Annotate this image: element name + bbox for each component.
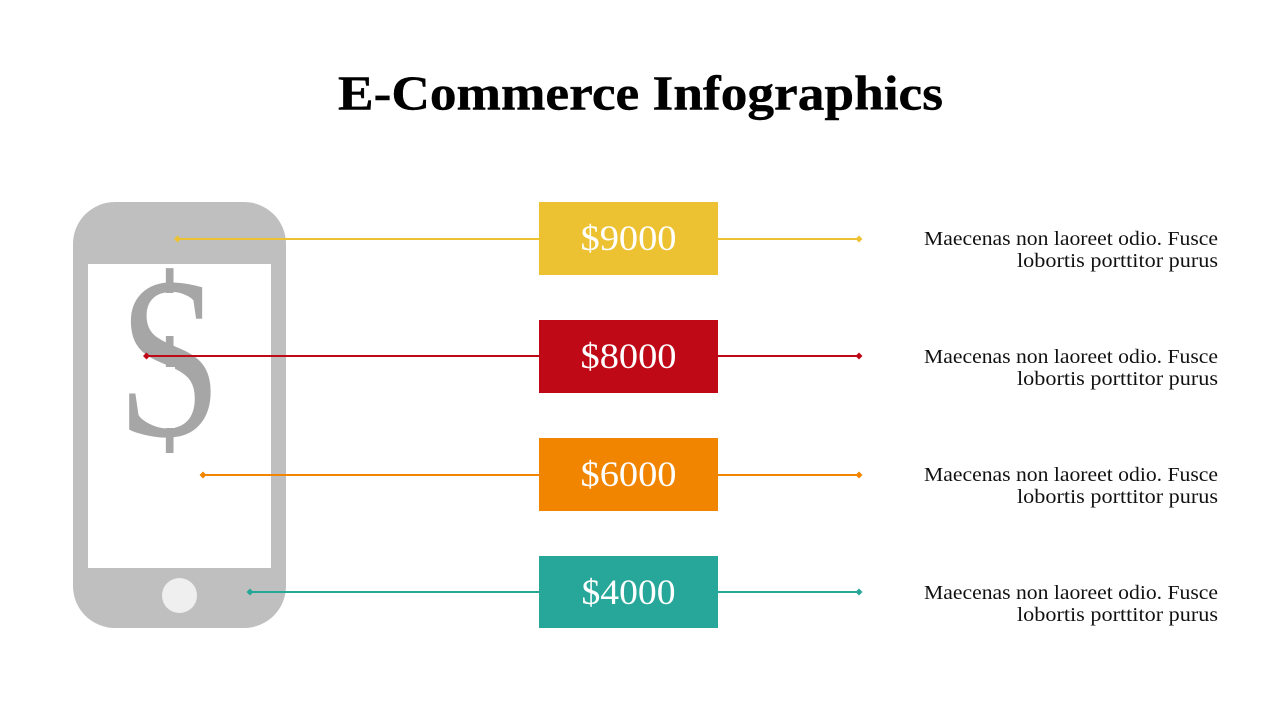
- value box red: [539, 320, 718, 393]
- description: Maecenas non laoreet odio. Fusce: [924, 346, 1218, 368]
- value box yellow: [539, 202, 718, 275]
- connector line yellow: [177, 238, 859, 240]
- connector line teal: [250, 591, 859, 593]
- row: $4000: [246, 556, 1218, 628]
- description: lobortis porttitor purus: [1017, 250, 1218, 272]
- description: Maecenas non laoreet odio. Fusce: [924, 582, 1218, 604]
- description: lobortis porttitor purus: [1017, 604, 1218, 626]
- description: Maecenas non laoreet odio. Fusce: [924, 228, 1218, 250]
- value box teal: [539, 556, 718, 628]
- connector line red: [147, 355, 859, 357]
- right marker yellow: [856, 236, 862, 242]
- description: Maecenas non laoreet odio. Fusce: [924, 464, 1218, 486]
- title: E-Commerce Infographics: [338, 66, 943, 120]
- description: lobortis porttitor purus: [1017, 486, 1218, 508]
- connector line orange: [203, 474, 859, 476]
- value label: $4000: [582, 572, 676, 612]
- dollar sign: $: [121, 229, 217, 486]
- phone screen: [88, 264, 271, 568]
- icon: smartphone with dollar sign: [73, 202, 286, 628]
- left marker orange: [200, 472, 206, 478]
- phone home button: [162, 578, 197, 613]
- row: $6000: [200, 438, 1218, 511]
- description: lobortis porttitor purus: [1017, 368, 1218, 390]
- row: $9000: [174, 202, 1218, 275]
- left marker red: [143, 352, 150, 360]
- right marker teal: [856, 588, 862, 596]
- left marker teal: [246, 588, 254, 596]
- value label: $8000: [580, 336, 676, 376]
- row: $8000: [143, 320, 1218, 393]
- value label: $9000: [580, 218, 676, 258]
- left marker yellow: [174, 236, 181, 242]
- value label: $6000: [580, 454, 676, 494]
- value box orange: [539, 438, 718, 511]
- phone body: [73, 202, 286, 628]
- right marker red: [856, 352, 862, 360]
- right marker orange: [856, 472, 862, 478]
